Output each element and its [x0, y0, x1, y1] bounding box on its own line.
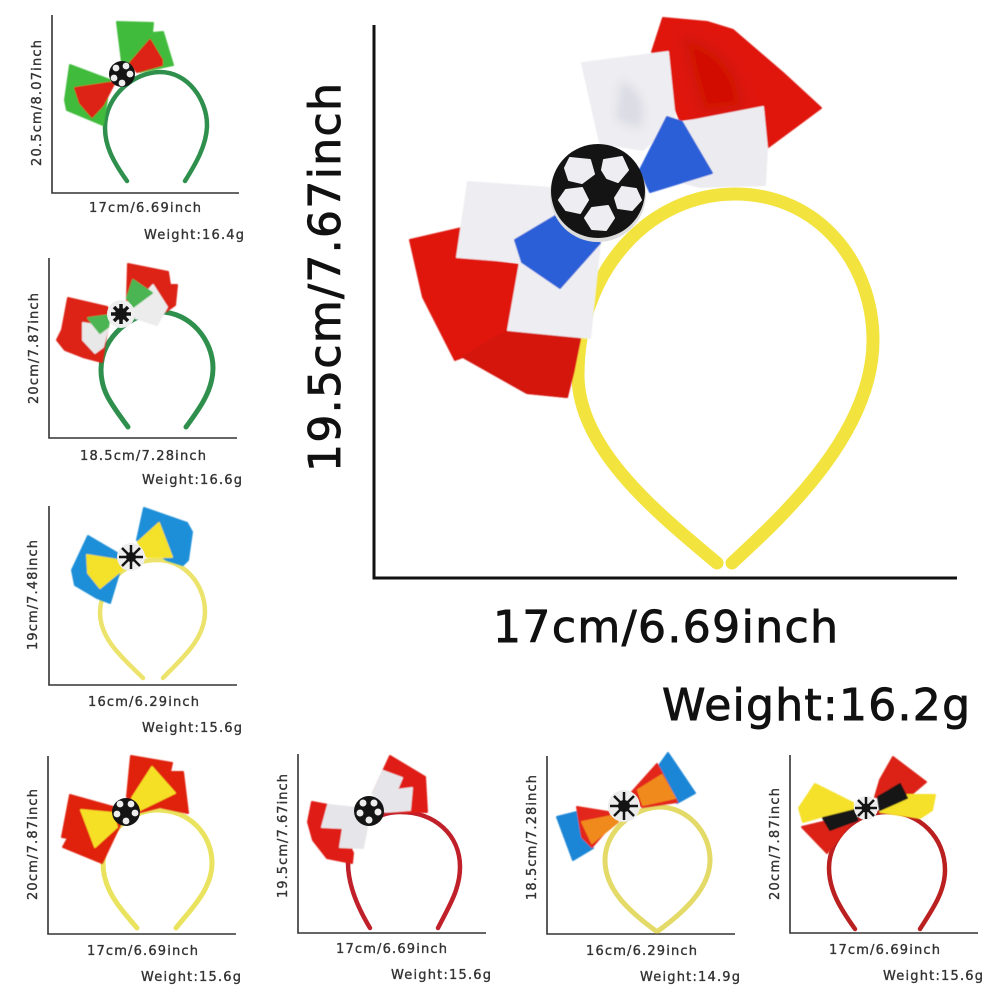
- band: [829, 812, 945, 929]
- labels: 20cm/7.87inch: [26, 789, 41, 900]
- axes: [298, 754, 486, 933]
- main football: [550, 144, 646, 242]
- labels: [26, 789, 241, 985]
- bow: [62, 756, 188, 863]
- football: [112, 798, 140, 826]
- axes: [48, 756, 236, 934]
- labels: 17cm/6.69inch: [336, 942, 447, 957]
- axes: [547, 756, 735, 934]
- football: [117, 543, 145, 571]
- axes: [790, 755, 978, 933]
- labels: Weight:15.6g: [391, 968, 491, 983]
- labels: 16cm/6.29inch: [88, 695, 199, 710]
- panel: red yellow black headband: [768, 755, 983, 984]
- labels: [26, 540, 242, 736]
- main yellow band: [578, 194, 873, 563]
- football: [354, 796, 384, 826]
- panel: red and white headband: [276, 754, 491, 983]
- labels: 18.5cm/7.28inch: [525, 775, 540, 900]
- panel: green and red headband: [30, 15, 244, 243]
- labels: 20.5cm/8.07inch: [30, 40, 45, 166]
- labels: [30, 40, 244, 243]
- main width label: 17cm/6.69inch: [493, 602, 838, 653]
- labels: 19.5cm/7.67inch: [276, 774, 291, 898]
- labels: Weight:16.6g: [142, 473, 242, 488]
- bow: [65, 22, 173, 125]
- football: [107, 300, 135, 328]
- labels: 17cm/6.69inch: [87, 944, 198, 959]
- bow: [57, 264, 177, 362]
- main axes: [374, 25, 957, 578]
- football: [109, 61, 135, 87]
- panel: rainbow headband: [525, 753, 740, 985]
- panel: blue and yellow headband: [26, 506, 242, 736]
- band: [605, 807, 710, 931]
- labels: 16cm/6.29inch: [586, 944, 697, 959]
- labels: 19cm/7.48inch: [26, 540, 41, 650]
- band: [348, 812, 460, 928]
- labels: [276, 774, 491, 983]
- labels: Weight:15.6g: [883, 969, 983, 984]
- axes: [52, 15, 239, 193]
- labels: Weight:14.9g: [640, 970, 740, 985]
- panel: red and yellow headband: [26, 756, 241, 985]
- band: [103, 810, 212, 928]
- band: [105, 72, 207, 181]
- labels: 17cm/6.69inch: [829, 943, 940, 958]
- labels: Weight:16.4g: [144, 228, 244, 243]
- band: [101, 312, 213, 427]
- bow: [799, 757, 935, 853]
- axes: [49, 258, 237, 438]
- bow: [308, 756, 427, 863]
- labels: 20cm/7.87inch: [27, 293, 42, 404]
- bow: [72, 508, 192, 603]
- main bow: [410, 18, 821, 397]
- labels: [525, 775, 740, 985]
- main weight label: Weight:16.2g: [662, 680, 970, 731]
- labels: Weight:15.6g: [141, 970, 241, 985]
- labels: 20cm/7.87inch: [768, 788, 783, 900]
- axes: [49, 506, 237, 685]
- labels: Weight:15.6g: [142, 721, 242, 736]
- panel: main headband: [374, 18, 957, 578]
- football: [608, 790, 640, 822]
- labels: 17cm/6.69inch: [89, 201, 201, 216]
- band: [100, 560, 205, 678]
- football: [854, 796, 878, 820]
- labels: [27, 293, 242, 488]
- labels: [768, 788, 983, 984]
- main height label: 19.5cm/7.67inch: [300, 83, 351, 472]
- labels: 18.5cm/7.28inch: [80, 449, 206, 464]
- bow: [557, 753, 695, 860]
- panel: red white green headband: [27, 258, 242, 488]
